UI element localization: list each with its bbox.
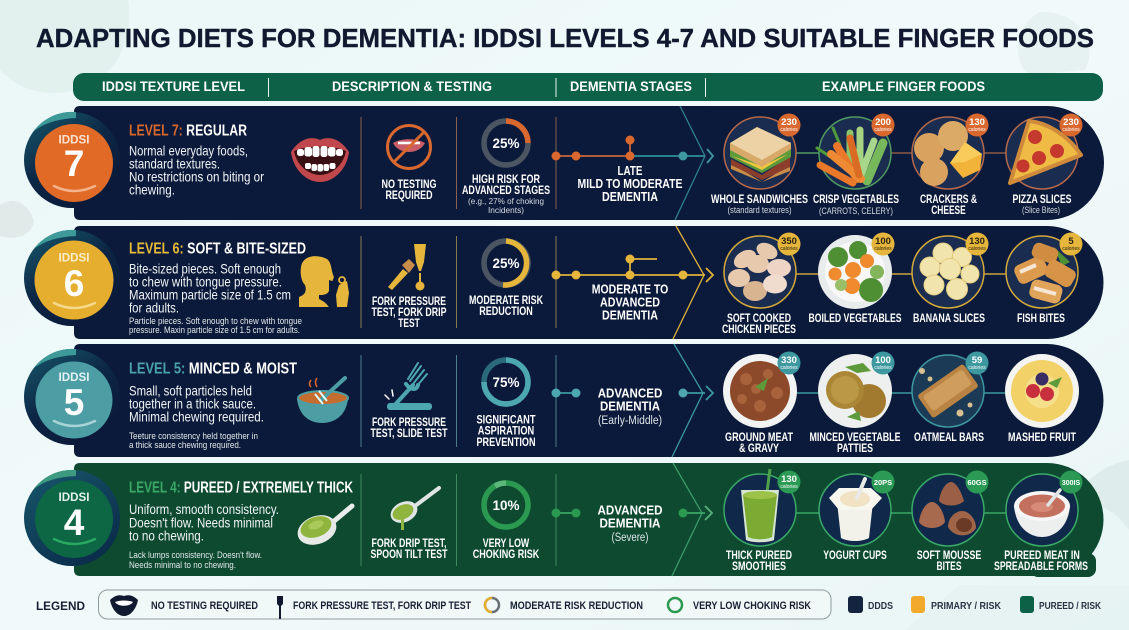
donut chart: 75% [484, 360, 528, 404]
colour key: amber [911, 596, 1002, 613]
level 5 badge: IDDSI [58, 370, 90, 384]
calorie badges: 59 [972, 355, 982, 366]
level 4 badge: 4 [64, 502, 85, 543]
dementia stage label: LATE [618, 163, 643, 178]
dementia stage timeline [552, 136, 705, 160]
legend label: FORK PRESSURE TEST, FORK DRIP TEST [293, 600, 471, 612]
food labels: WHOLE SANDWICHES [711, 194, 808, 206]
dementia stage timeline [552, 508, 705, 518]
icon: bowl with fork [297, 378, 348, 423]
food labels: SOFT MOUSSE [917, 550, 982, 562]
donut chart: 25% [484, 121, 528, 165]
column header bar: IDDSI TEXTURE LEVEL [102, 79, 245, 94]
food labels: MINCED VEGETABLE [810, 432, 901, 444]
calorie badges [778, 470, 1082, 494]
food: soft mousse bites [912, 474, 984, 546]
food labels: CRACKERS & [920, 194, 977, 206]
risk label: SIGNIFICANT [476, 414, 536, 426]
calorie badges: 130 [969, 117, 985, 128]
level 5 badge: 5 [64, 382, 84, 423]
calorie badges: calories [874, 365, 892, 371]
food labels [711, 194, 1072, 217]
level 6 description: Particle pieces. Soft enough to chew with tongue [129, 316, 302, 327]
column header bar: DEMENTIA STAGES [570, 79, 692, 94]
calorie badges: 230 [1063, 117, 1079, 128]
colour key: navy: DDDS [868, 601, 893, 612]
icon: spoon tilt drip test [387, 488, 439, 530]
calorie badges: 5 [1068, 236, 1074, 247]
level 7 description: No restrictions on biting or [129, 168, 264, 184]
legend icon: green ring [668, 598, 682, 612]
food: pureed meat in spreadable forms [1006, 474, 1078, 546]
food labels: CRISP VEGETABLES [813, 194, 899, 206]
dementia stage timeline [552, 254, 705, 280]
level 5 description: together in a thick sauce. [129, 396, 256, 412]
testing label: REQUIRED [386, 190, 432, 202]
testing label: TEST, FORK DRIP [372, 307, 447, 319]
icon: no testing required [388, 126, 430, 168]
legend label: VERY LOW CHOKING RISK [693, 600, 811, 612]
food labels: CHEESE [931, 205, 966, 217]
risk label: VERY LOW [483, 538, 529, 550]
food labels: PIZZA SLICES [1012, 194, 1072, 206]
icon: person chewing [299, 256, 349, 307]
food labels: BOILED VEGETABLES [808, 313, 902, 325]
food: mashed fruit [1005, 354, 1079, 428]
level 5 description: Small, soft particles held [129, 382, 252, 398]
dementia stage label: ADVANCED [598, 502, 662, 518]
risk label [476, 414, 536, 449]
dementia stage label: DEMENTIA [600, 516, 661, 530]
risk label: PREVENTION [476, 437, 536, 449]
testing label [370, 538, 448, 561]
donut chart: 25%: 25% [492, 255, 520, 271]
testing label: TEST [398, 318, 420, 330]
calorie badges: calories [968, 365, 986, 371]
dementia stage timeline [552, 388, 705, 398]
food: thick pureed smoothies [724, 469, 796, 546]
legend label: NO TESTING REQUIRED [151, 600, 258, 612]
food labels [725, 432, 1076, 455]
calorie badges: calories [874, 246, 892, 252]
level 5 description: a thick sauce chewing required. [129, 440, 241, 451]
legend [36, 590, 1102, 619]
calorie badges: calories [780, 484, 798, 490]
calorie badges: calories [780, 246, 798, 252]
calorie badges: calories [874, 127, 892, 133]
level 7 description: chewing. [129, 182, 175, 198]
donut chart: 10% [484, 483, 528, 527]
testing label: TEST, SLIDE TEST [370, 428, 448, 440]
food labels: BANANA SLICES [913, 313, 985, 325]
legend icon: moderate ring [485, 598, 499, 612]
testing label: SPOON TILT TEST [370, 549, 448, 561]
dementia stage label [598, 502, 662, 544]
calorie badges: calories [780, 127, 798, 133]
level 6 badge: IDDSI [58, 250, 90, 264]
food: minced vegetable patties [818, 354, 892, 428]
legend heading: LEGEND [36, 599, 85, 613]
risk label: MODERATE RISK [469, 295, 544, 307]
calorie badges: calories [780, 365, 798, 371]
dementia stage label: DEMENTIA [602, 308, 659, 322]
calorie badges: 330 [781, 355, 797, 366]
legend icon: fork [277, 596, 283, 619]
food labels: OATMEAL BARS [914, 432, 984, 444]
level 5 badge [24, 349, 120, 445]
level 7 badge: 7 [64, 143, 84, 184]
food labels: MASHED FRUIT [1008, 432, 1076, 444]
food labels: BITES [936, 561, 962, 573]
food: crisp vegetables [817, 117, 891, 189]
level 7 description: standard textures. [129, 156, 220, 172]
testing label [382, 179, 437, 202]
level 6 description [129, 260, 302, 336]
food labels: PATTIES [837, 443, 873, 455]
dementia stage label [578, 163, 683, 204]
level 4 description: Lack lumps consistency. Doesn't flow. [129, 550, 262, 561]
testing label [372, 296, 447, 330]
food labels: & GRAVY [739, 443, 779, 455]
level 4 badge [24, 470, 120, 566]
level 7 description: Normal everyday foods, [129, 142, 248, 158]
food: yogurt cups [819, 474, 891, 546]
food labels: SMOOTHIES [732, 561, 786, 573]
panel: level 5 row [24, 344, 1103, 457]
column header bar [73, 73, 1103, 101]
testing label: FORK DRIP TEST, [372, 538, 446, 550]
food labels: (CARROTS, CELERY) [819, 206, 893, 217]
dementia stage label [592, 282, 668, 322]
dementia stage label: DEMENTIA [600, 398, 661, 414]
calorie badges: 20PS [874, 478, 892, 487]
risk label: REDUCTION [479, 306, 533, 318]
food labels: THICK PUREED [726, 550, 792, 562]
dementia stage label: ADVANCED [598, 386, 662, 400]
panel: level 6 row [24, 226, 1104, 339]
food: crackers and cheese [912, 117, 984, 189]
colour key: navy [848, 596, 893, 613]
food labels: YOGURT CUPS [823, 550, 887, 562]
food: whole sandwiches [724, 117, 796, 189]
calorie badges: calories [1062, 127, 1080, 133]
food: soft cooked chicken pieces [724, 236, 796, 308]
level 4 description: Uniform, smooth consistency. [129, 501, 279, 517]
icon: smiling mouth [291, 138, 349, 182]
title: ADAPTING DIETS FOR DEMENTIA: IDDSI LEVELS 4-7 AND SUITABLE FINGER FOODS [36, 23, 1094, 53]
level 5 description [129, 382, 264, 451]
colour key: amber: PRIMARY / RISK [931, 601, 1002, 612]
food labels: CHICKEN PIECES [722, 324, 796, 336]
level 7 badge: IDDSI [58, 132, 90, 146]
level 6 description: to chew with tongue pressure. [129, 274, 282, 290]
legend box [98, 590, 831, 619]
calorie badges: calories [1062, 246, 1080, 252]
colour key: green [1020, 596, 1102, 613]
colour key: green: PUREED / RISK [1039, 601, 1102, 612]
legend icon: mouth [110, 595, 138, 616]
food labels: (Slice Bites) [1022, 205, 1060, 216]
testing label: NO TESTING [382, 179, 437, 191]
calorie badges: calories [968, 246, 986, 252]
dementia stage label: (Early-Middle) [598, 415, 662, 427]
testing label: FORK PRESSURE [372, 296, 446, 308]
dementia stage label: ADVANCED [600, 294, 660, 310]
level 6 heading: LEVEL 6: SOFT & BITE-SIZED [129, 240, 306, 258]
calorie badges: 130 [969, 236, 985, 247]
calorie badges: 60GS [967, 478, 987, 487]
food labels: (standard textures) [728, 205, 792, 216]
calorie badges: 100 [875, 355, 891, 366]
panel: level 4 row [24, 463, 1104, 577]
level 6 description: for adults. [129, 300, 179, 316]
risk label [473, 538, 540, 561]
food: oatmeal bars [912, 355, 984, 427]
calorie badges: 200 [875, 117, 891, 128]
food labels [722, 313, 1065, 336]
food labels: PUREED MEAT IN [1004, 550, 1080, 562]
level 6 description: pressure. Maxin particle size of 1.5 cm for adults. [129, 325, 300, 336]
column header bar: DESCRIPTION & TESTING [332, 79, 492, 94]
dementia stage label: MILD TO MODERATE [578, 176, 683, 191]
calorie badges [778, 232, 1082, 256]
level 5 heading: LEVEL 5: MINCED & MOIST [129, 360, 297, 378]
calorie badges: 230 [781, 117, 797, 128]
testing label: FORK PRESSURE [372, 417, 446, 429]
food labels: SOFT COOKED [727, 313, 791, 325]
donut chart: 25%: 25% [492, 135, 520, 151]
risk label [462, 174, 550, 215]
level 6 badge [24, 230, 120, 326]
dementia stage label: MODERATE TO [592, 282, 668, 296]
food: ground meat and gravy [723, 354, 797, 428]
testing label [370, 417, 448, 440]
level 7 description [129, 142, 264, 198]
dementia stage label: (Severe) [612, 532, 649, 544]
level 4 description: Needs minimal to no chewing. [129, 560, 236, 571]
risk label: (e.g., 27% of choking [468, 196, 544, 206]
risk label: ASPIRATION [478, 426, 534, 438]
dementia stage label [598, 386, 662, 427]
food: boiled vegetables [818, 235, 892, 309]
level 5 description: Teeture consistency held together in [129, 431, 258, 442]
calorie badges [778, 352, 988, 374]
calorie badges: 350 [781, 236, 797, 247]
donut chart: 25% [484, 241, 528, 285]
risk label: CHOKING RISK [473, 549, 540, 561]
level 6 description: Bite-sized pieces. Soft enough [129, 260, 281, 276]
legend label: MODERATE RISK REDUCTION [510, 600, 643, 612]
level 4 heading: LEVEL 4: PUREED / EXTREMELY THICK [129, 480, 354, 496]
calorie badges: 100 [875, 236, 891, 247]
dementia stage label: DEMENTIA [602, 189, 659, 204]
donut chart: 10%: 10% [492, 497, 520, 513]
calorie badges: 300IS [1062, 480, 1080, 487]
level 5 description: Minimal chewing required. [129, 408, 264, 424]
food labels [726, 550, 1088, 573]
food labels: FISH BITES [1017, 313, 1065, 325]
level 4 description [129, 501, 279, 571]
calorie badges: calories [968, 127, 986, 133]
calorie badges [778, 114, 1082, 136]
food labels: SPREADABLE FORMS [994, 561, 1088, 573]
level 7 heading: LEVEL 7: REGULAR [129, 122, 247, 140]
level 4 description: to no chewing. [129, 528, 204, 544]
level 6 description: Maximum particle size of 1.5 cm [129, 286, 291, 302]
donut chart: 75%: 75% [492, 374, 520, 390]
risk label [469, 295, 544, 318]
level 4 badge: IDDSI [58, 490, 90, 504]
column header bar: EXAMPLE FINGER FOODS [822, 79, 985, 94]
panel: level 7 row [24, 106, 1104, 220]
icon: spoon with puree [293, 506, 352, 550]
level 7 badge [24, 112, 120, 208]
icon: fork pressure test [388, 244, 426, 290]
food labels: GROUND MEAT [725, 432, 793, 444]
risk label: HIGH RISK FOR [472, 174, 541, 186]
risk label: ADVANCED STAGES [462, 185, 550, 197]
level 6 badge: 6 [64, 263, 84, 304]
food: banana slices [912, 236, 984, 308]
level 4 description: Doesn't flow. Needs minimal [129, 514, 273, 530]
food: fish bites [1006, 236, 1078, 308]
risk label: Incidents) [488, 205, 524, 215]
icon: fork slide test [385, 363, 432, 410]
calorie badges: 130 [781, 474, 797, 485]
food: pizza slices [1006, 117, 1081, 189]
